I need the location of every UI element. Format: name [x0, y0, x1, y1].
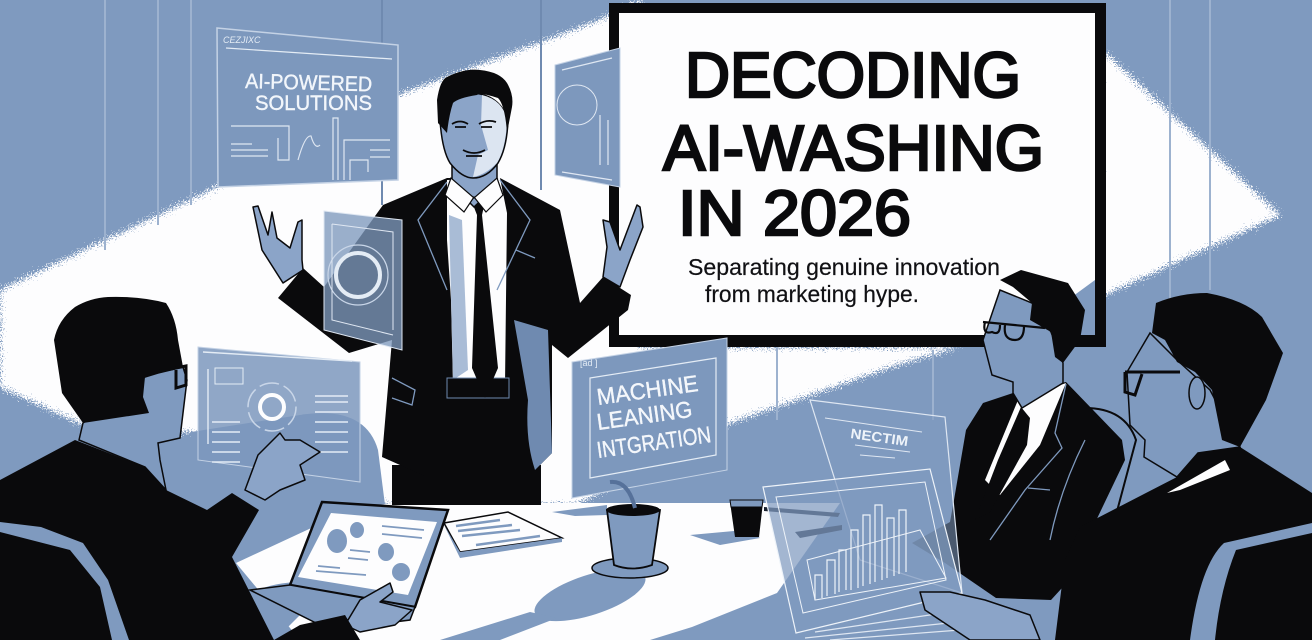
panel: machine learning integration: [572, 338, 727, 498]
dark reflection streaks on table: [764, 507, 842, 538]
jacket: [1055, 447, 1312, 640]
conference table: [236, 503, 840, 640]
jacket highlight: [514, 320, 552, 470]
face and neck: [1127, 333, 1240, 477]
wall with light beam: [0, 0, 1280, 505]
panel: left dashboard: [198, 347, 360, 482]
glasses: [1125, 372, 1180, 395]
title: decoding ai-washing in 2026: DECODING: [685, 39, 1021, 111]
hand: [245, 433, 320, 500]
jacket: [912, 382, 1125, 600]
neck and face: [79, 367, 187, 490]
lapel lines: [990, 384, 1085, 540]
chair: [1190, 523, 1312, 640]
panel: machine learning integration: INTGRATION: [595, 421, 713, 463]
shirt shade: [449, 215, 468, 380]
panel: machine learning integration: [ad ]: [580, 358, 598, 368]
collar: [445, 178, 503, 212]
hair: [1000, 270, 1085, 363]
subtitle: [688, 254, 1000, 307]
chair band: [0, 522, 129, 640]
glasses: [155, 366, 186, 388]
jacket: [278, 178, 631, 477]
title: decoding ai-washing in 2026: AI-WASHING: [663, 112, 1044, 184]
tablet panel: back: NECTIM: [850, 425, 909, 449]
shirt: [447, 178, 507, 385]
chair behind right man: [1085, 408, 1136, 530]
title: decoding ai-washing in 2026: [663, 39, 1044, 249]
subtitle: from marketing hype.: [705, 281, 919, 307]
table shadows: [240, 505, 760, 640]
shirt: [985, 383, 1066, 495]
ear: [1189, 377, 1205, 409]
presenter: [253, 70, 643, 505]
lapels: [392, 180, 535, 405]
panel: small sketch panel: [555, 48, 620, 187]
panel: ai-powered solutions: SOLUTIONS: [255, 92, 372, 115]
panel: ai-powered solutions: [217, 28, 398, 187]
right hand: [603, 205, 643, 287]
face highlight: [473, 95, 507, 177]
panel: machine learning integration: LEANING: [595, 396, 694, 435]
tie: [470, 197, 498, 398]
facial features: [452, 121, 496, 156]
right front man: [1055, 293, 1312, 640]
dark cup: [730, 500, 763, 537]
shirt collar: [1167, 460, 1230, 493]
face: [440, 93, 508, 178]
panel: ai-powered solutions: AI-POWERED: [245, 70, 372, 96]
glasses: [983, 322, 1045, 340]
right man's hand: [920, 592, 1040, 640]
belt: [447, 378, 509, 398]
coffee cup: [592, 482, 668, 578]
laptop: [250, 502, 448, 640]
title screen: [609, 3, 1106, 347]
panel: machine learning integration: MACHINE: [595, 370, 700, 410]
hair: [1152, 293, 1283, 447]
tie: [975, 407, 1030, 520]
wall panel seams: [105, 0, 1210, 420]
tablet panel: back: [810, 400, 962, 593]
documents on table: [444, 512, 562, 558]
jacket: [0, 440, 274, 640]
subtitle: Separating genuine innovation: [688, 254, 1000, 280]
title: decoding ai-washing in 2026: IN 2026: [678, 177, 911, 249]
panel: ai-powered solutions: CEZJIXC: [223, 35, 261, 45]
trousers: [392, 465, 541, 505]
tablet panel: bar chart: [763, 469, 962, 633]
front man on the left: [0, 297, 320, 640]
neck: [452, 160, 497, 207]
hair: [54, 297, 183, 423]
shadow behind left panel: [191, 413, 385, 560]
hair: [437, 70, 512, 133]
right middle man: [912, 270, 1125, 600]
left hand: [253, 206, 303, 283]
panel: centre ring hologram: [324, 211, 402, 350]
keyboard under tablet: [800, 600, 966, 640]
face and neck: [983, 290, 1063, 408]
